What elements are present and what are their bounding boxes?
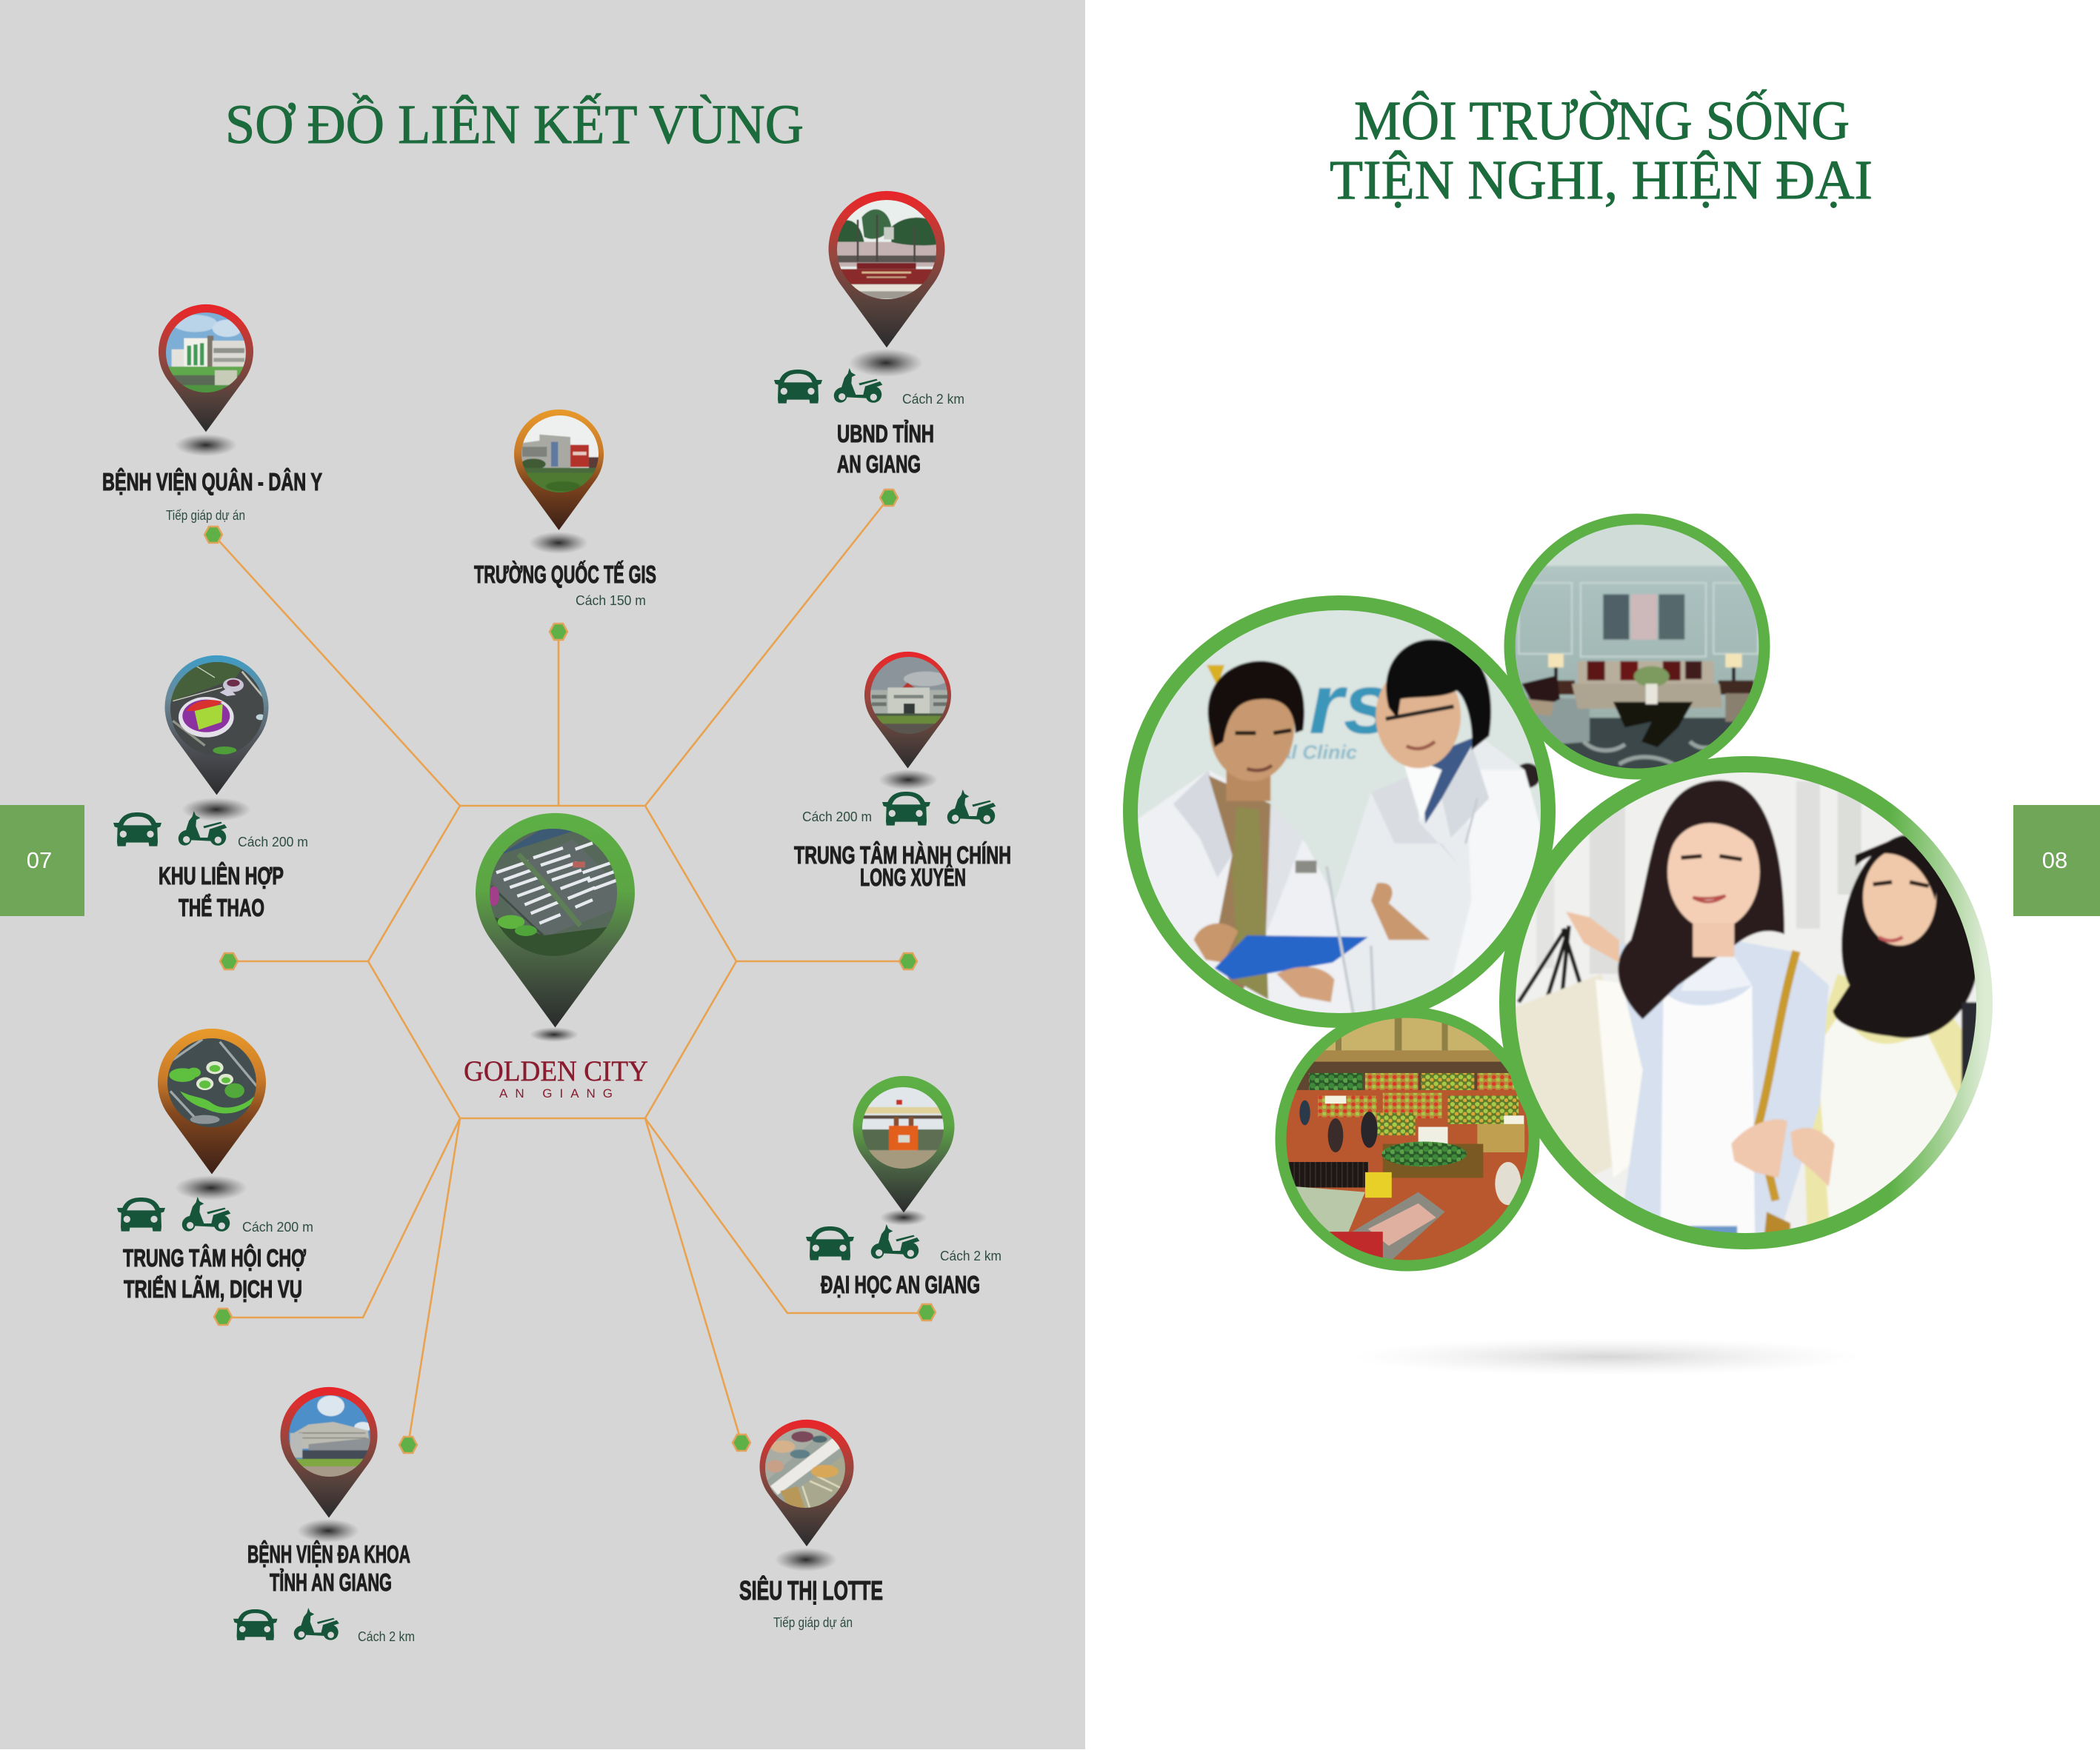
pin shadow <box>775 1548 837 1572</box>
distance note: Cách 200 m <box>802 809 872 824</box>
pin marker <box>476 813 635 1027</box>
pin photo: stadium <box>170 662 264 755</box>
label line 2: THỂ THAO <box>179 894 264 921</box>
heading: moi truong song tien nghi hien dai: TIỆN NGHI, HIỆN ĐẠI <box>1330 150 1873 211</box>
photo ring <box>1281 1012 1534 1266</box>
location: Khu lien hop the thao <box>113 655 308 921</box>
ground shadow under photo cluster <box>1352 1337 1863 1376</box>
label: TRUNG TÂM HỘI CHỢ <box>123 1243 307 1272</box>
location: Benh vien Quan - Dan y <box>102 304 322 523</box>
icon: car <box>806 1226 854 1260</box>
pin shadow <box>849 349 923 377</box>
distance note: Cách 2 km <box>940 1249 1001 1263</box>
distance note: Tiếp giáp dự án <box>166 508 245 523</box>
icon: motorbike <box>182 1197 230 1232</box>
distance note: Cách 200 m <box>242 1220 313 1235</box>
label line 2: LONG XUYÊN <box>860 864 966 891</box>
pin shadow <box>297 1519 359 1543</box>
photo circle: living room <box>1501 510 1779 787</box>
icon: car <box>233 1609 277 1640</box>
logo subline: AN GIANG <box>499 1086 613 1101</box>
logo wordmark: GOLDEN CITY <box>464 1055 648 1087</box>
icon: motorbike <box>294 1608 339 1640</box>
icon: motorbike <box>947 789 996 824</box>
photo circle: shoppers <box>1495 753 1997 1258</box>
photo circle: doctors: rsi <box>1309 656 1419 751</box>
label line 2: AN GIANG <box>837 450 921 478</box>
pin photo: administrative centre <box>870 657 947 734</box>
location: Truong quoc te GIS <box>474 410 656 608</box>
connector end nodes <box>204 490 936 1453</box>
distance note: Cách 200 m <box>238 835 308 849</box>
icon: car <box>882 792 930 826</box>
location: Trung tam hanh chinh Long Xuyen <box>794 652 1011 891</box>
pin photo: school building <box>521 415 599 492</box>
pin marker <box>853 1076 954 1212</box>
location: Benh vien da khoa tinh An Giang <box>233 1387 415 1644</box>
pin photo: general hospital <box>289 1395 370 1477</box>
photo ring <box>1507 764 1984 1241</box>
pin photo: project aerial <box>487 827 620 961</box>
photo circle: supermarket <box>1270 1002 1542 1275</box>
pin shadow <box>529 532 588 554</box>
icon: motorbike <box>834 368 882 403</box>
photo ring <box>1510 519 1764 774</box>
icon: motorbike <box>179 811 227 846</box>
panel: left page <box>0 0 1085 1749</box>
pin shadow <box>175 434 237 456</box>
pin marker <box>829 191 944 347</box>
pin shadow <box>181 798 251 821</box>
page tab 07 <box>0 805 84 916</box>
location: Trung tam hoi cho trien lam <box>117 1029 313 1303</box>
location: UBND tinh An Giang <box>774 191 964 478</box>
label: SIÊU THỊ LOTTE <box>739 1574 883 1606</box>
pin marker <box>158 1029 266 1175</box>
label: KHU LIÊN HỢP <box>159 862 284 889</box>
photo circle: doctors <box>1111 589 1572 1036</box>
heading: moi truong song tien nghi hien dai <box>1330 90 1873 211</box>
pin photo: hospital building <box>166 313 246 393</box>
photo circle: doctors: ational Clinic <box>1232 741 1357 763</box>
distance note: Cách 150 m <box>576 593 646 608</box>
pin shadow <box>879 769 938 790</box>
heading: moi truong song tien nghi hien dai: MÔI TRƯỜNG SỐNG <box>1354 90 1850 152</box>
icon: car <box>113 812 161 846</box>
label: TRƯỜNG QUỐC TẾ GIS <box>474 560 656 588</box>
pin marker <box>760 1420 853 1546</box>
distance note: Tiếp giáp dự án <box>773 1615 853 1630</box>
icon: car <box>774 370 822 404</box>
distance note: Cách 2 km <box>902 392 964 407</box>
pin photo: provincial office <box>835 198 939 301</box>
heading: so do lien ket vung: SƠ ĐỒ LIÊN KẾT VÙNG <box>225 94 804 156</box>
distance note: Cách 2 km <box>358 1629 415 1644</box>
label: UBND TỈNH <box>837 420 934 447</box>
pin photo: university gate <box>862 1087 944 1169</box>
label: ĐẠI HỌC AN GIANG <box>821 1271 980 1298</box>
icon: motorbike <box>871 1224 919 1259</box>
pin marker <box>159 304 253 432</box>
location: Sieu thi Lotte <box>739 1420 883 1630</box>
pin photo: shopping mall <box>765 1428 845 1508</box>
page tab 08 <box>2013 805 2100 916</box>
pin marker <box>165 655 268 795</box>
pin shadow <box>880 1209 927 1226</box>
label: BỆNH VIỆN ĐA KHOA <box>247 1540 410 1568</box>
icon: car <box>117 1198 165 1232</box>
pin shadow <box>530 1027 579 1042</box>
pin photo: exhibition aerial <box>167 1038 256 1127</box>
page tab 08: 08 <box>2042 847 2067 873</box>
pin shadow <box>175 1175 247 1200</box>
label: TRUNG TÂM HÀNH CHÍNH <box>794 841 1011 869</box>
photo ring <box>1130 603 1548 1021</box>
label line 2: TRIỂN LÃM, DỊCH VỤ <box>124 1275 302 1303</box>
location: Dai hoc An Giang <box>806 1076 1001 1298</box>
label: BỆNH VIỆN QUÂN - DÂN Y <box>102 468 322 495</box>
page tab 07: 07 <box>27 847 52 873</box>
pin marker <box>280 1387 378 1517</box>
central pin and logo: Golden City <box>464 813 648 1101</box>
pin marker <box>514 410 604 530</box>
label line 2: TỈNH AN GIANG <box>270 1569 392 1596</box>
connector network <box>213 498 927 1445</box>
pin marker <box>864 652 951 769</box>
